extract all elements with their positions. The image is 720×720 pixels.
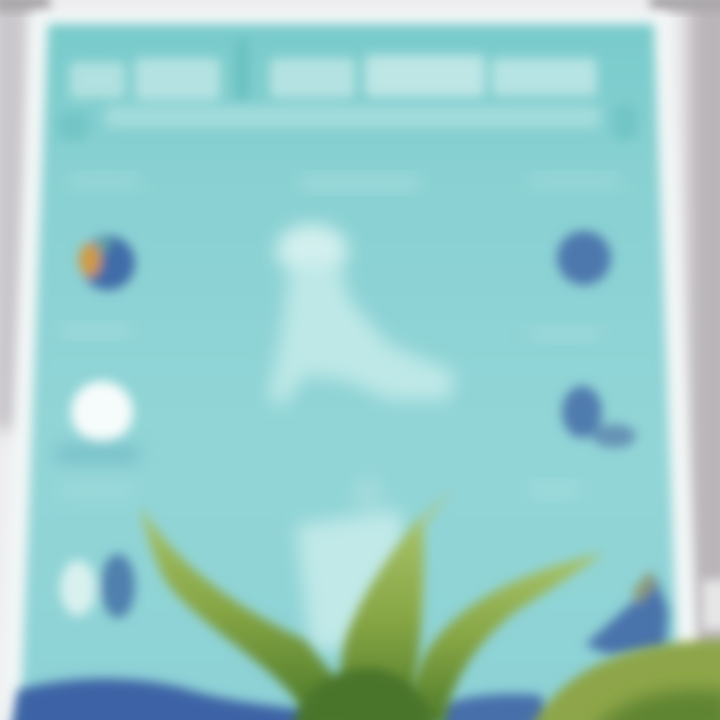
leaf: far left [140,505,345,715]
title [58,40,638,140]
central illustration: pale container [296,478,415,650]
bottom blue wave [10,679,560,720]
text: left middle [55,447,140,495]
central illustration: white dinosaur figure [268,224,455,405]
plant base [292,668,435,720]
leaf: right [405,552,605,720]
leaf: tip [418,485,455,535]
icon: white circle left middle [71,381,133,443]
label: left top [60,325,130,337]
leaf: centre [341,515,424,720]
icon: half white half blue circle, left bottom [60,554,135,618]
label: right middle [530,483,580,497]
subheading text [70,176,620,190]
icon: multicolour globe [79,236,135,290]
label: right top [530,328,600,340]
icon: blue figure right middle [562,386,636,448]
icon: blue chart right bottom [585,570,668,655]
icon: blue circle right top [557,231,611,285]
leaf: foreground right [530,640,720,720]
plant: aloe leaves [140,485,720,720]
